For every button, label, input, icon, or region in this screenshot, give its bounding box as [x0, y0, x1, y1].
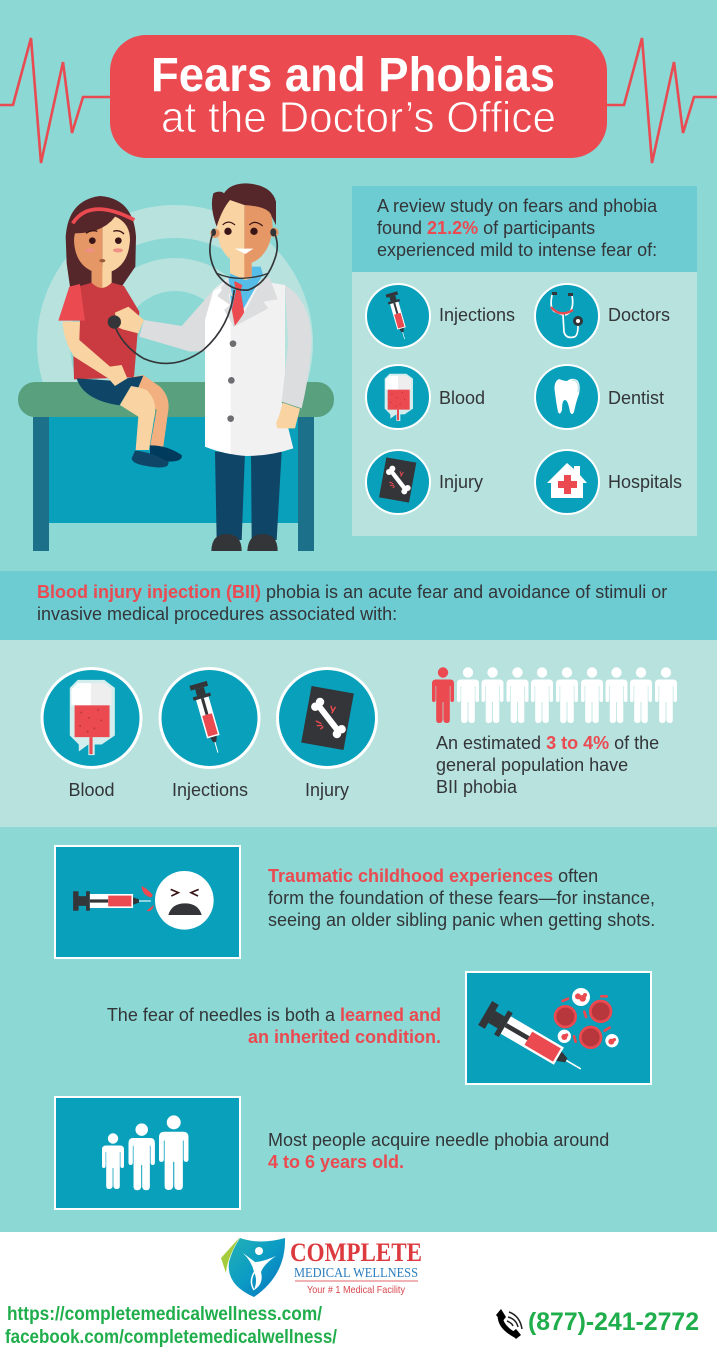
- label: doctors: Doctors: [608, 305, 670, 325]
- label: dentist: Dentist: [608, 388, 664, 408]
- icon: injections: [366, 284, 430, 348]
- study text: experienced mild to intense fear of:: [377, 240, 657, 260]
- icon: blood bag large: [42, 668, 141, 768]
- logo subtitle: MEDICAL WELLNESS: [294, 1266, 418, 1281]
- phone number: (877)-241-2772: [528, 1308, 699, 1336]
- text: needle phobia age: 4 to 6 years old.: [268, 1152, 404, 1172]
- logo tagline: Your # 1 Medical Facility: [307, 1284, 406, 1296]
- icon: blood bag: [366, 365, 430, 429]
- title line 2: at the Doctor’s Office: [161, 93, 556, 142]
- panel: BII stimuli: [0, 640, 717, 827]
- title line 1: Fears and Phobias: [151, 49, 555, 102]
- doctor hand on patient: [115, 307, 144, 333]
- logo: [221, 1237, 422, 1297]
- title banner: [110, 35, 607, 158]
- panel: crying face and syringe: [55, 846, 240, 958]
- label: injections: Injections: [439, 305, 515, 325]
- facebook url: facebook.com/completemedicalwellness/: [5, 1327, 338, 1348]
- label: hospitals: Hospitals: [608, 472, 682, 492]
- icon: injury x-ray: [366, 450, 430, 514]
- study text: [377, 196, 658, 260]
- population statistic text: An estimated 3 to 4% of the: [436, 733, 659, 753]
- logo shield: [221, 1237, 285, 1297]
- icon: phone: [496, 1309, 522, 1339]
- heartbeat line left: [0, 38, 112, 163]
- panel: three children growing: [55, 1097, 240, 1209]
- population statistic text: [436, 733, 659, 797]
- label: blood: Blood: [68, 780, 115, 800]
- text: learned and inherited: [107, 1005, 441, 1047]
- population statistic text: BII phobia: [436, 777, 518, 797]
- exam table: [18, 382, 334, 551]
- concentric rings: [37, 205, 313, 481]
- pictogram: 1 in 10 people: [432, 667, 677, 723]
- panel header: [352, 186, 697, 272]
- logo name: COMPLETE: [290, 1238, 422, 1267]
- text: learned and inherited: The fear of needles is both a learned and: [107, 1005, 441, 1025]
- text: needle phobia age: Most people acquire needle phobia around: [268, 1130, 609, 1150]
- panel: syringe and blood cells: [466, 972, 651, 1084]
- label: blood: Blood: [439, 388, 485, 408]
- footer: [0, 1232, 717, 1357]
- text: traumatic childhood experiences: seeing an older sibling panic when getting shots.: [268, 910, 655, 930]
- doctor: [139, 183, 312, 551]
- icon: doctors stethoscope: [535, 284, 599, 348]
- text: traumatic childhood experiences: [268, 866, 655, 930]
- banner: BII definition: invasive medical procedures associated with:: [37, 604, 397, 624]
- banner: BII definition: [0, 571, 717, 640]
- banner: BII definition: Blood injury injection (BII) phobia is an acute fear and avoidance of stimuli or: [37, 582, 667, 602]
- icon: dentist tooth: [535, 365, 599, 429]
- study text: found 21.2% of participants: [377, 218, 595, 238]
- label: injury: Injury: [305, 780, 349, 800]
- population statistic text: general population have: [436, 755, 628, 775]
- label: injections: Injections: [172, 780, 248, 800]
- stethoscope: [108, 228, 277, 363]
- label: injury: Injury: [439, 472, 483, 492]
- study text: A review study on fears and phobia: [377, 196, 658, 216]
- panel body: [352, 272, 697, 536]
- website url: https://completemedicalwellness.com/: [7, 1304, 323, 1325]
- illustration: doctor and patient: [18, 183, 334, 551]
- text: learned and inherited: an inherited condition.: [248, 1027, 441, 1047]
- panel: study review: [352, 186, 697, 536]
- icon: syringe large: [160, 668, 259, 768]
- icon: hospital house: [535, 450, 599, 514]
- girl patient: [58, 196, 182, 467]
- text: needle phobia age: [268, 1130, 609, 1172]
- icon: x-ray large: [278, 668, 376, 768]
- heartbeat line right: [605, 38, 717, 163]
- text: traumatic childhood experiences: form the foundation of these fears—for instance,: [268, 888, 655, 908]
- text: traumatic childhood experiences: Traumatic childhood experiences often: [268, 866, 598, 886]
